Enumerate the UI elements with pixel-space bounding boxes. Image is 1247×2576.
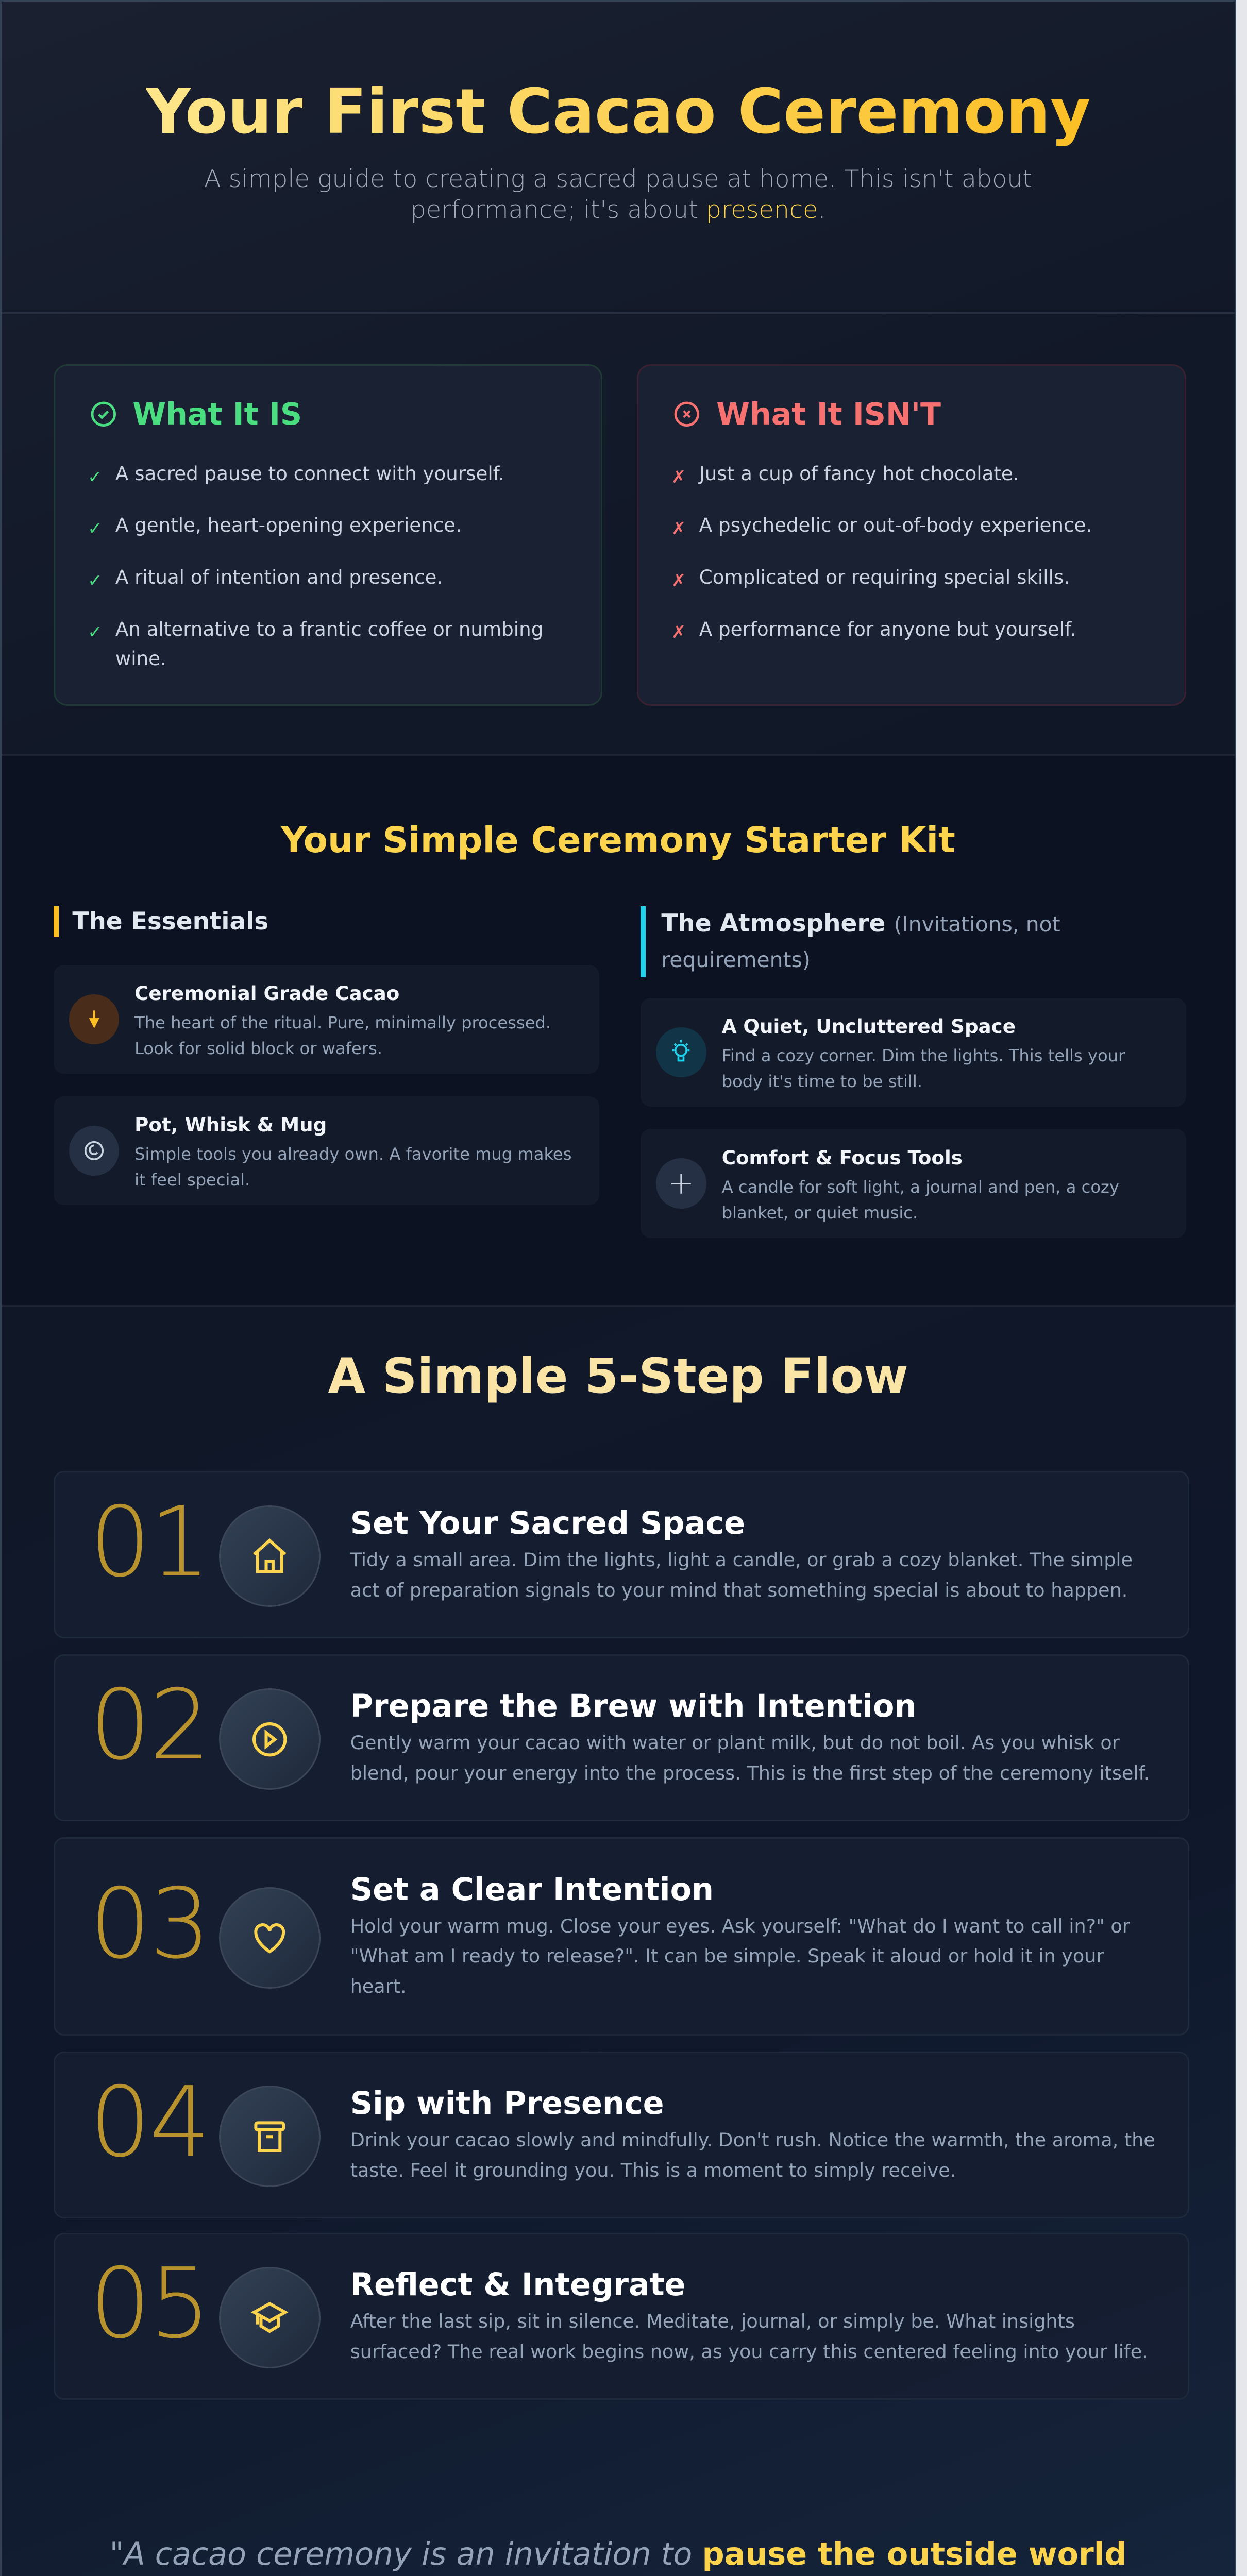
step 2: Gently warm your cacao with water or plant milk, but do not boil. As you whisk or blend, pour your energy into the process. This is the first step of the ceremony itself. [350, 1732, 1150, 1784]
panel: what it is: A sacred pause to connect with yourself. [115, 462, 504, 485]
panel: what it isn't: A performance for anyone but yourself. [699, 618, 1076, 640]
panel: what it isn't: Just a cup of fancy hot chocolate. [699, 462, 1019, 485]
subheading: atmosphere [641, 906, 1179, 977]
section: starter kit [2, 754, 1235, 1307]
step 4: Drink your cacao slowly and mindfully. Don't rush. Notice the warmth, the aroma, the taste. Feel it grounding you. This is a moment to simply receive. [350, 2129, 1155, 2181]
step 3 [54, 1837, 1189, 2036]
step 2: 02 [90, 1669, 209, 1782]
step 1: Set Your Sacred Space [350, 1505, 745, 1541]
card: cacao: The heart of the ritual. Pure, minimally processed. Look for solid block or wafers. [134, 1013, 551, 1058]
step 4 [54, 2052, 1189, 2218]
step 2: Prepare the Brew with Intention [350, 1688, 916, 1724]
panel: what it isn't: ✗ [671, 467, 686, 487]
card: quiet space: A Quiet, Uncluttered Space [722, 1015, 1016, 1038]
panel: what it is: ✓ [88, 622, 102, 642]
icon: plus [656, 1158, 706, 1209]
card: comfort: Comfort & Focus Tools [722, 1146, 963, 1169]
subheading: essentials: The Essentials [72, 907, 268, 936]
list: is [88, 462, 543, 670]
card: tools: Simple tools you already own. A favorite mug makes it feel special. [134, 1144, 571, 1190]
card: tools: Pot, Whisk & Mug [134, 1113, 327, 1136]
card: comfort: A candle for soft light, a journal and pen, a cozy blanket, or quiet music. [722, 1177, 1119, 1223]
icon: archive [219, 2086, 321, 2187]
card: quiet space: Find a cozy corner. Dim the lights. This tells your body it's time to be still. [722, 1046, 1125, 1091]
panel: what it is: ✓ [88, 518, 102, 538]
step 3: 03 [90, 1868, 209, 1980]
panel: what it is: ✓ [88, 570, 102, 590]
subheading: atmosphere: The Atmosphere (Invitations, not requirements) [661, 909, 1060, 972]
icon: play [219, 1688, 321, 1790]
heading: what it is: What It IS [132, 397, 302, 432]
step 3: Set a Clear Intention [350, 1872, 714, 1908]
panel: what it is: A ritual of intention and presence. [115, 566, 443, 588]
panel: what it isn't: ✗ [671, 622, 686, 642]
panel: what it is: A gentle, heart-opening experience. [115, 514, 462, 536]
heading: 5-step flow: A Simple 5-Step Flow [328, 1348, 908, 1404]
panel: what it isn't: Complicated or requiring special skills. [699, 566, 1070, 588]
card: comfort [641, 1129, 1186, 1238]
card: tools [54, 1096, 599, 1205]
panel: what it is: ✓ [88, 467, 102, 487]
card: quiet space [641, 998, 1186, 1107]
step 1: Tidy a small area. Dim the lights, light a candle, or grab a cozy blanket. The simple act of preparation signals to your mind that something special is about to happen. [350, 1549, 1133, 1601]
step 4: Sip with Presence [350, 2086, 664, 2122]
header section [2, 2, 1235, 314]
step 1: 01 [90, 1486, 209, 1599]
title: Your First Cacao Ceremony [146, 76, 1091, 148]
icon: tools [69, 1126, 119, 1176]
heading: what it isn't: What It ISN'T [716, 397, 941, 432]
panel: what it isn't [637, 364, 1186, 706]
icon: plus: + [668, 1165, 694, 1201]
step 2 [54, 1654, 1189, 1821]
step 1 [54, 1471, 1189, 1638]
panel: what it is: An alternative to a frantic coffee or numbing wine. [115, 618, 543, 670]
list: isn't [671, 462, 1092, 642]
step 5 [54, 2233, 1189, 2400]
icon: cacao [69, 994, 119, 1044]
subtitle: A simple guide to creating a sacred pause at home. This isn't about performance; it's about presence. [204, 165, 1032, 224]
step 4: 04 [90, 2066, 209, 2179]
heading: starter kit: Your Simple Ceremony Starter Kit [281, 820, 955, 861]
icon: home [219, 1505, 321, 1607]
step 3: Hold your warm mug. Close your eyes. Ask yourself: "What do I want to call in?" or "What am I ready to release?". It can be simple. Speak it aloud or hold it in your heart. [350, 1915, 1130, 1997]
step 5: Reflect & Integrate [350, 2267, 685, 2303]
panel: what it isn't: A psychedelic or out-of-body experience. [699, 514, 1092, 536]
card: cacao: Ceremonial Grade Cacao [134, 982, 399, 1005]
icon: lightbulb [656, 1027, 706, 1077]
panel: what it is [54, 364, 602, 706]
panel: what it isn't: ✗ [671, 570, 686, 590]
icon: heart [219, 1887, 321, 1989]
step 5: 05 [90, 2248, 209, 2360]
icon: graduation cap [219, 2267, 321, 2368]
panel: what it isn't: ✗ [671, 518, 686, 538]
card: cacao [54, 965, 599, 1074]
step 5: After the last sip, sit in silence. Meditate, journal, or simply be. What insights surfaced? The real work begins now, as you carry this centered feeling into your life. [350, 2310, 1148, 2363]
